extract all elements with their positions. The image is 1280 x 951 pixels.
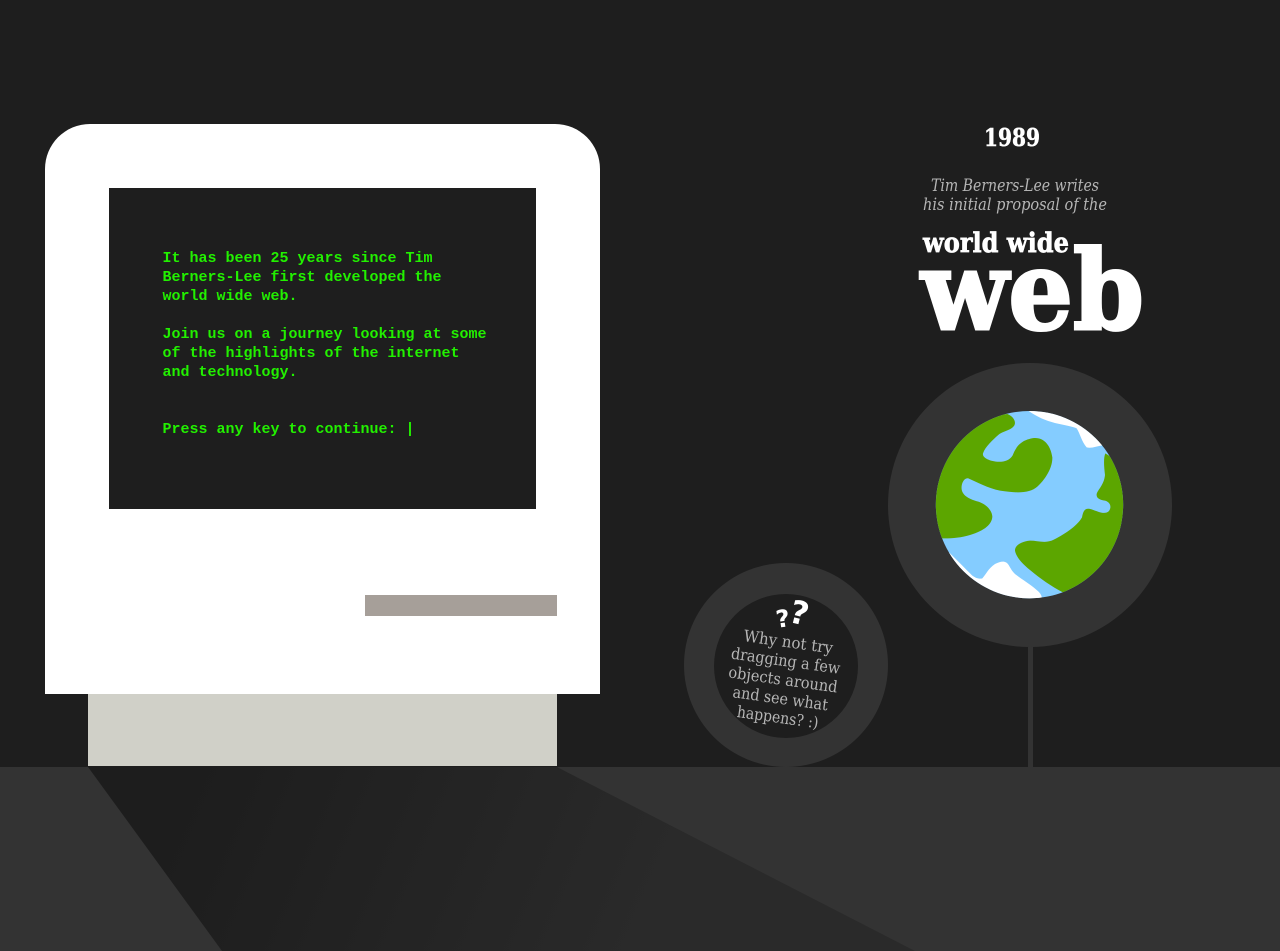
drag hint badge <box>684 563 888 767</box>
world wide web wordmark: web <box>920 226 1144 355</box>
hint text: happens? :) <box>736 702 820 732</box>
computer stand <box>88 694 557 766</box>
disk drive slot <box>365 595 557 616</box>
icon: globe <box>936 411 1124 598</box>
badge inner disc <box>714 594 858 738</box>
screen intro text: Press any key to continue: | <box>162 421 415 438</box>
screen intro text: Join us on a journey looking at some <box>162 326 487 343</box>
screen intro text <box>162 250 487 438</box>
screen intro text: of the highlights of the internet <box>162 345 460 362</box>
badge outer ring <box>684 563 888 767</box>
hint text: dragging a few <box>730 644 842 678</box>
hint text: objects around <box>727 662 839 697</box>
computer body <box>45 124 600 694</box>
floor <box>0 767 1280 951</box>
screen intro text: Berners-Lee first developed the <box>162 269 442 286</box>
ice cap: south <box>949 552 1042 598</box>
land: south-east continent <box>1015 453 1127 593</box>
proposal text: Tim Berners-Lee writes <box>931 176 1099 196</box>
computer <box>45 124 600 766</box>
icon: question marks <box>774 592 813 634</box>
hint text: and see what <box>732 682 830 714</box>
land: north-west continent <box>927 414 1052 538</box>
year heading: 1989 <box>984 123 1040 152</box>
computer shadow on floor <box>88 767 915 951</box>
proposal text: his initial proposal of the <box>923 195 1107 215</box>
world wide web wordmark: world wide <box>922 228 1069 259</box>
hint text <box>722 625 844 734</box>
signpost disc <box>888 363 1172 647</box>
icon: question marks: ? <box>786 592 813 634</box>
screen intro text: and technology. <box>162 364 298 381</box>
computer screen <box>109 188 536 509</box>
screen intro text: world wide web. <box>162 288 298 305</box>
screen intro text: It has been 25 years since Tim <box>162 250 433 267</box>
icon: question marks: ? <box>774 604 792 634</box>
signpost pole <box>1028 640 1033 767</box>
ice cap: north <box>1028 411 1102 448</box>
hint text: Why not try <box>742 626 834 658</box>
proposal text <box>923 176 1107 215</box>
globe signpost <box>888 363 1172 767</box>
